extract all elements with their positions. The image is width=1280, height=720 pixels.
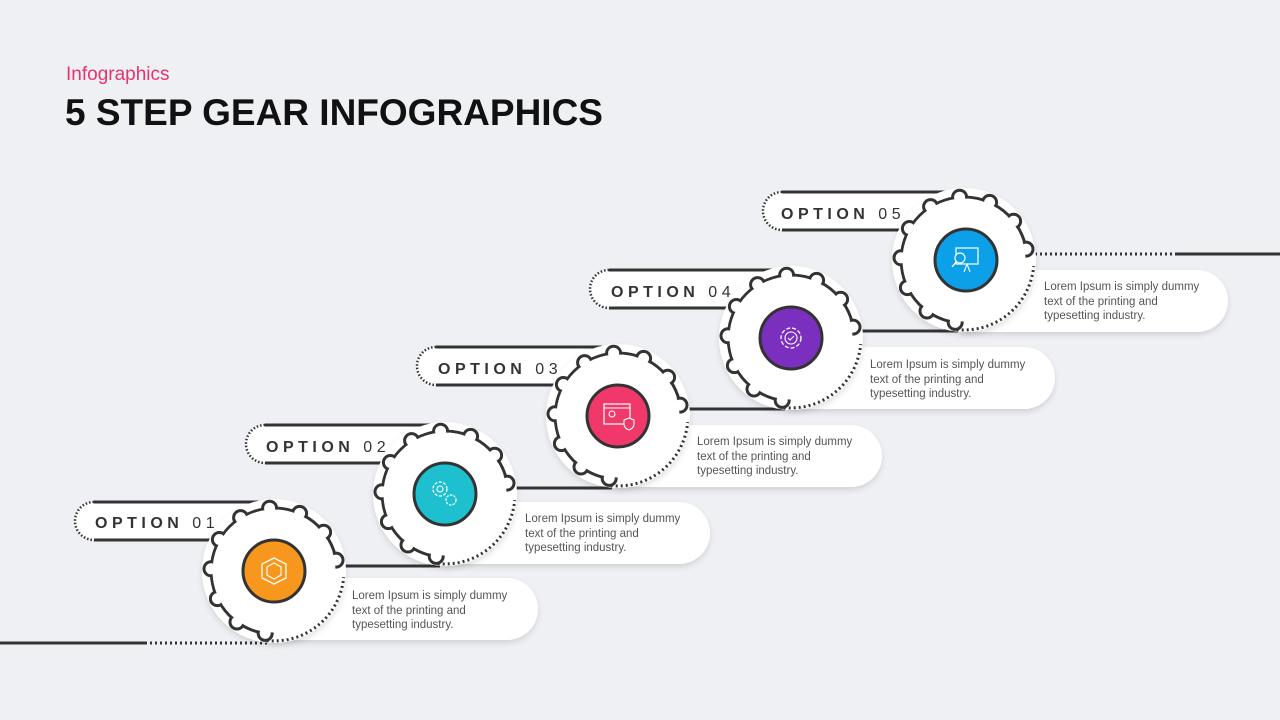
option pill 1: OPTION 01 (95, 515, 219, 532)
icon 2 (414, 463, 476, 525)
top line (1035, 252, 1280, 256)
text pill 2: typesetting industry. (525, 542, 626, 554)
text pill 3 (615, 425, 882, 487)
connector 2 (505, 486, 612, 490)
option pill 2 (246, 425, 431, 463)
text pill 2 (442, 502, 710, 564)
text pill 2: text of the printing and (525, 528, 639, 540)
text pill 3: text of the printing and (697, 451, 811, 463)
connector 3 (678, 408, 785, 410)
step 1 (75, 499, 538, 643)
connector 1 (335, 564, 440, 568)
option pill 2: OPTION 02 (266, 439, 390, 456)
text pill 4 (788, 347, 1055, 409)
icon 3 (587, 385, 649, 447)
gear 4 (719, 266, 863, 410)
connector 4 (851, 330, 958, 332)
text pill 3: Lorem Ipsum is simply dummy (697, 436, 853, 448)
text pill 5 (961, 270, 1228, 332)
bottom line (0, 642, 270, 644)
text pill 4: text of the printing and (870, 374, 984, 386)
title: 5 STEP GEAR INFOGRAPHICS (65, 92, 603, 133)
subtitle: Infographics (66, 64, 170, 85)
step 5 (763, 188, 1228, 332)
gear 3 (546, 344, 690, 488)
gear 5 (892, 188, 1036, 332)
option pill 4: OPTION 04 (611, 284, 735, 301)
option pill 5 (763, 192, 948, 230)
text pill 1: Lorem Ipsum is simply dummy (352, 590, 508, 602)
text pill 5: Lorem Ipsum is simply dummy (1044, 281, 1200, 293)
gear 1 (202, 499, 346, 643)
option pill 1 (75, 502, 260, 540)
icon 1 (243, 540, 305, 602)
text pill 1: text of the printing and (352, 605, 466, 617)
option pill 5: OPTION 05 (781, 206, 905, 223)
text pill 1: typesetting industry. (352, 619, 453, 631)
icon 4 (760, 307, 822, 369)
text pill 2: Lorem Ipsum is simply dummy (525, 513, 681, 525)
option pill 3 (417, 347, 602, 385)
step 4 (590, 266, 1055, 410)
icon 5 (935, 229, 997, 291)
text pill 5: typesetting industry. (1044, 310, 1145, 322)
text pill 4: typesetting industry. (870, 388, 971, 400)
step 2 (246, 422, 710, 566)
text pill 3: typesetting industry. (697, 465, 798, 477)
option pill 4 (590, 270, 775, 308)
text pill 4: Lorem Ipsum is simply dummy (870, 359, 1026, 371)
text pill 1 (270, 578, 538, 640)
option pill 3: OPTION 03 (438, 361, 562, 378)
step 3 (417, 344, 882, 488)
text pill 5: text of the printing and (1044, 296, 1158, 308)
gear 2 (373, 422, 517, 566)
